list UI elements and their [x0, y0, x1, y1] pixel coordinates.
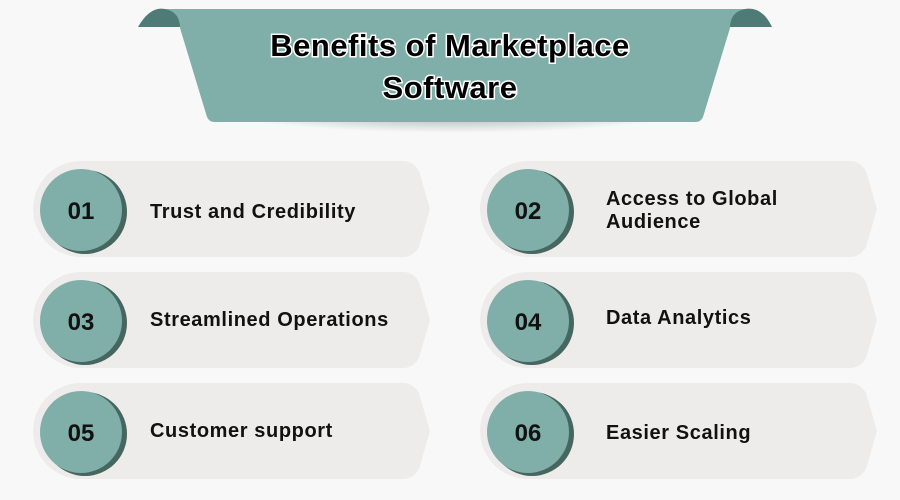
item 04: Data Analytics: [606, 307, 752, 329]
item 04: [480, 272, 877, 368]
item 06: 06: [515, 420, 541, 447]
item 03: 03: [68, 309, 94, 336]
item 06: Easier Scaling: [606, 422, 751, 444]
item 01: Trust and Credibility: [150, 201, 356, 223]
item 05: Customer support: [150, 420, 333, 442]
item 02: 02: [515, 198, 541, 225]
item 06: [480, 383, 877, 479]
item 05: 05: [68, 420, 94, 447]
item 05: [33, 383, 430, 479]
title text: Software: [383, 70, 517, 105]
item 02: Access to Global: [606, 188, 778, 210]
item 02: [480, 161, 877, 257]
item 01: [33, 161, 430, 257]
title text: [270, 28, 630, 105]
title banner: [138, 9, 772, 146]
item 03: Streamlined Operations: [150, 309, 389, 331]
item 02: Audience: [606, 211, 701, 233]
item 01: 01: [68, 198, 94, 225]
title text: Benefits of Marketplace: [270, 28, 630, 63]
item 04: 04: [515, 309, 542, 336]
item 03: [33, 272, 430, 368]
